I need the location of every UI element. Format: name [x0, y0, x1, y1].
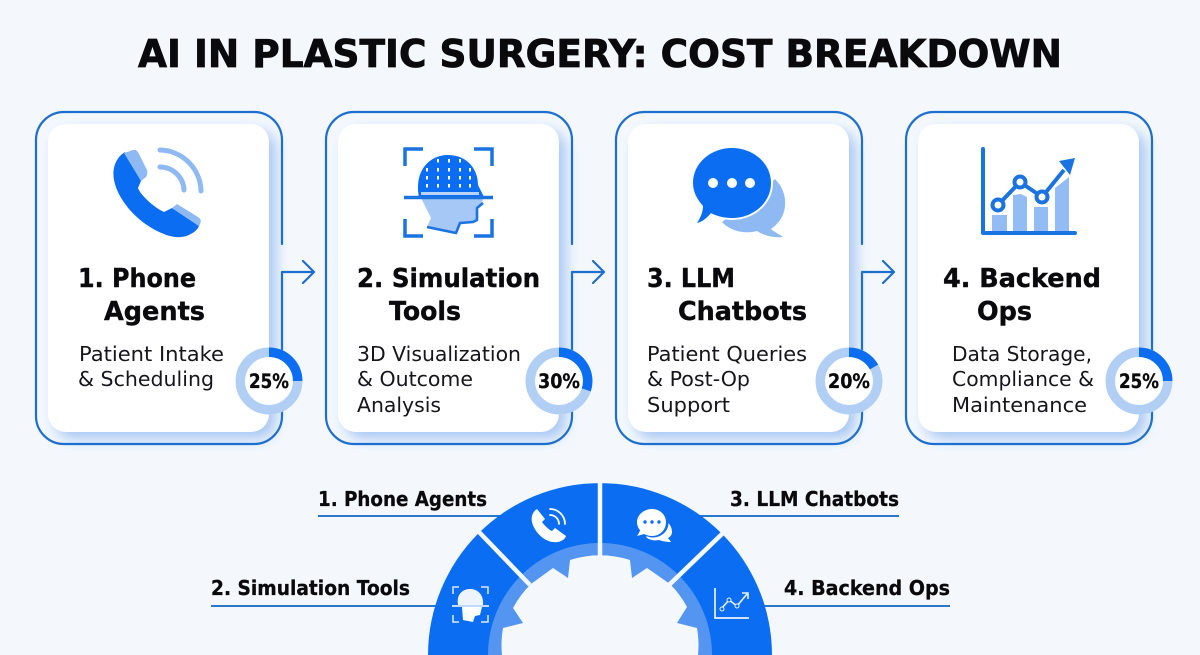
icon: phone white — [532, 509, 566, 542]
heading — [357, 264, 540, 327]
icon: head scan — [404, 149, 493, 236]
description: Compliance & — [952, 367, 1094, 391]
panel: LLM chatbots — [616, 112, 894, 444]
heading: Ops — [977, 297, 1032, 327]
panel: backend ops — [906, 112, 1172, 444]
card background — [628, 124, 849, 432]
donut: 25% — [1106, 348, 1172, 414]
icon: phone — [113, 150, 201, 237]
donut: 25%: 25% — [249, 370, 289, 393]
gear centre — [501, 555, 699, 655]
description: Maintenance — [952, 393, 1087, 417]
label: backend ops: 4. Backend Ops — [784, 576, 950, 600]
card frame with arrow — [326, 112, 604, 444]
card frame — [906, 112, 1152, 444]
donut: 30% — [526, 348, 592, 414]
heading: 1. Phone — [78, 264, 196, 294]
icon: chat bubbles — [691, 146, 785, 237]
description: & Post-Op — [647, 367, 750, 391]
chart: semicircle gauge — [428, 482, 772, 655]
heading: Chatbots — [678, 297, 807, 327]
icon: growth chart — [983, 149, 1075, 233]
description: Patient Intake — [79, 342, 224, 366]
description: Support — [647, 393, 730, 417]
icon: chart white — [715, 588, 749, 618]
donut: 20% — [816, 348, 882, 414]
icon: chat white — [637, 508, 672, 542]
description: Data Storage, — [952, 342, 1092, 366]
icon: head scan white — [452, 587, 489, 622]
panel: simulation tools — [326, 112, 604, 444]
description: Patient Queries — [647, 342, 807, 366]
description: Analysis — [357, 393, 441, 417]
label: phone agents: 1. Phone Agents — [318, 487, 487, 511]
segment dividers — [479, 482, 723, 585]
title: AI IN PLASTIC SURGERY: COST BREAKDOWN — [138, 32, 1062, 76]
heading: Agents — [104, 297, 205, 327]
donut: 25% — [236, 348, 302, 414]
heading — [78, 264, 205, 327]
label: LLM chatbots: 3. LLM Chatbots — [730, 487, 899, 511]
inner ring — [488, 543, 712, 655]
heading: 2. Simulation — [357, 264, 540, 294]
label: simulation tools: 2. Simulation Tools — [211, 576, 410, 600]
card background — [338, 124, 559, 432]
card background — [48, 124, 269, 432]
description — [952, 342, 1094, 417]
donut: 30%: 30% — [538, 370, 580, 393]
card background — [918, 124, 1139, 432]
description — [647, 342, 807, 417]
card frame with arrow — [616, 112, 894, 444]
heading: 3. LLM — [647, 264, 735, 294]
heading — [647, 264, 807, 327]
description: 3D Visualization — [357, 342, 521, 366]
heading: 4. Backend — [943, 264, 1101, 294]
donut: 20%: 20% — [828, 370, 870, 393]
heading: Tools — [389, 297, 461, 327]
description: & Outcome — [357, 367, 473, 391]
panel: phone agents — [36, 112, 314, 444]
description — [357, 342, 521, 417]
heading — [943, 264, 1101, 327]
donut: 25%: 25% — [1119, 370, 1159, 393]
card frame with arrow — [36, 112, 314, 444]
description — [78, 342, 224, 391]
description: & Scheduling — [78, 367, 214, 391]
outer ring — [428, 483, 772, 655]
